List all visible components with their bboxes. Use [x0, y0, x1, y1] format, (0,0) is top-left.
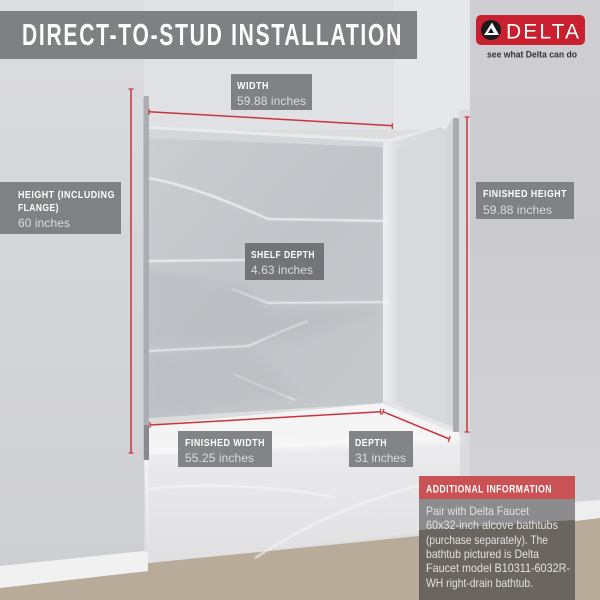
label: depth: 31 inches: [355, 451, 406, 465]
label: width: 59.88 inches: [237, 94, 306, 108]
label: shelf depth: SHELF DEPTH: [251, 249, 315, 261]
label: height including flange: 60 inches: [18, 216, 70, 230]
label: shelf depth: 4.63 inches: [251, 263, 313, 277]
panel body text: 60x32-inch alcove bathtubs: [426, 518, 558, 532]
icon: Delta circle mark: [481, 20, 501, 40]
label: width: WIDTH: [237, 80, 269, 92]
lower shelf shadows: [149, 270, 385, 345]
label: finished height: 59.88 inches: [483, 203, 552, 217]
logo: Delta: [476, 15, 585, 60]
panel body text: WH right-drain bathtub.: [426, 576, 533, 590]
logo: Delta: see what Delta can do: [487, 50, 577, 60]
left baseboard: [0, 551, 148, 588]
right baseboard: [560, 500, 600, 523]
title banner: [0, 11, 417, 59]
surround top rim: [149, 118, 453, 150]
measurement line: depth: [382, 409, 450, 442]
back wall panel: [149, 138, 385, 418]
panel heading: ADDITIONAL INFORMATION: [426, 484, 552, 496]
shower surround: [144, 96, 459, 460]
panel body text: Pair with Delta Faucet: [426, 504, 530, 518]
panel heading: [419, 476, 575, 499]
panel body text: [426, 504, 570, 590]
label: finished width: FINISHED WIDTH: [185, 437, 265, 449]
bathtub: [144, 403, 460, 563]
panel body text: Faucet model B10311-6032R-: [426, 561, 570, 575]
label: finished width: [178, 431, 272, 467]
label: finished height: [476, 182, 574, 219]
title banner: DIRECT-TO-STUD INSTALLATION: [22, 18, 403, 52]
label: finished width: 55.25 inches: [185, 451, 254, 465]
floor: [0, 518, 600, 600]
label: shelf depth: [245, 243, 324, 280]
rim shadow: [149, 129, 385, 147]
label: finished height: FINISHED HEIGHT: [483, 188, 567, 200]
panel body text: (purchase separately). The: [426, 533, 548, 547]
panel: additional information: [419, 476, 575, 600]
label: depth: DEPTH: [355, 437, 387, 449]
right flange: [453, 118, 459, 432]
label: width: [231, 74, 312, 110]
shelf highlights: [149, 178, 389, 400]
label: height including flange: FLANGE): [18, 202, 59, 214]
label: height including flange: HEIGHT (INCLUDING: [18, 189, 115, 201]
measurement line: height including flange: [128, 89, 134, 453]
logo: Delta: DELTA: [506, 20, 579, 44]
measurement line: finished height: [464, 117, 470, 432]
panel body text: bathtub pictured is Delta: [426, 547, 539, 561]
measurement line: finished width: [150, 409, 381, 428]
left flange: [144, 96, 149, 460]
side wall panel: [383, 118, 453, 432]
label: depth: [349, 431, 413, 467]
measurement line: width: [149, 109, 392, 129]
label: height including flange: [0, 182, 121, 234]
